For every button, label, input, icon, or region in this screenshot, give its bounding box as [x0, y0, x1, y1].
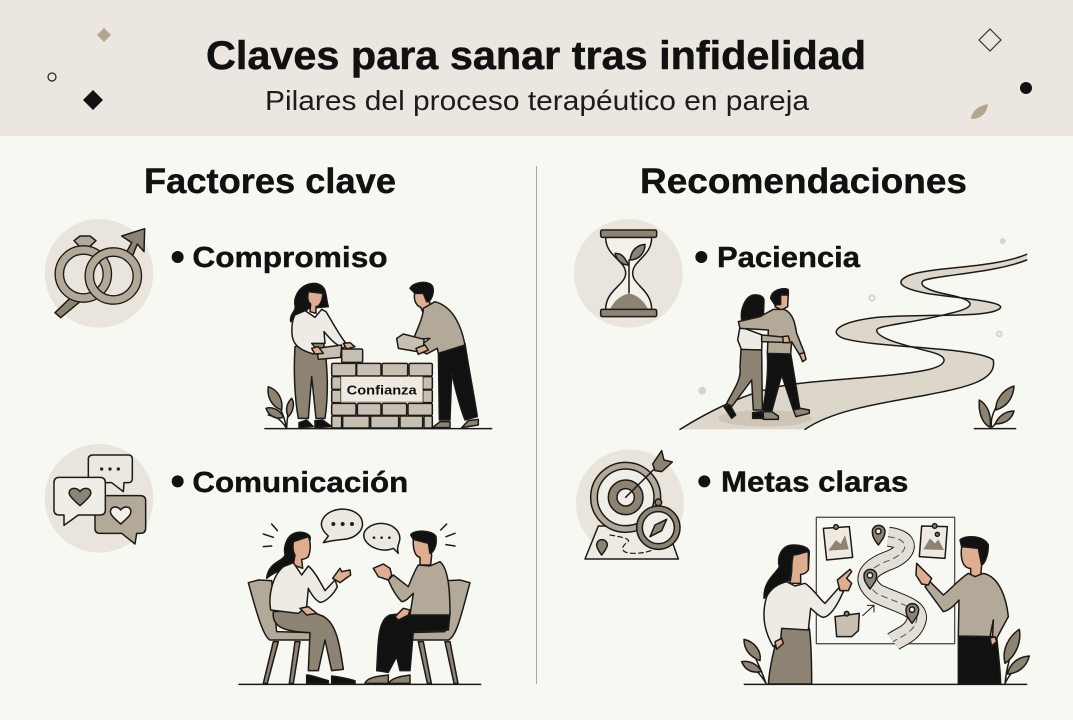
woman — [764, 545, 852, 684]
panel: compromiso — [45, 219, 492, 429]
bullet and label: compromiso: Compromiso — [192, 242, 388, 274]
dots — [331, 522, 391, 539]
icon: hourglass with sprout — [574, 219, 683, 328]
left chair — [248, 580, 312, 683]
brick wall: confianza — [332, 363, 432, 428]
plant — [974, 386, 1016, 429]
panel: paciencia — [574, 219, 1027, 429]
speech bubble — [321, 509, 362, 543]
bullet and label: metas claras: Metas claras — [721, 467, 908, 499]
right chair — [409, 580, 470, 683]
map pins — [864, 525, 919, 623]
pinned photo — [823, 525, 853, 560]
illustration: couple building a wall — [265, 282, 492, 429]
road — [867, 537, 917, 642]
arrow — [863, 605, 874, 616]
brick wall: confianza: Confianza — [347, 382, 417, 397]
subtitle: Pilares del proceso terapéutico en pareja — [265, 85, 809, 116]
header band — [0, 0, 1073, 136]
man — [365, 531, 450, 683]
panel: comunicación — [45, 444, 481, 684]
woman — [291, 283, 363, 428]
panel: metas claras — [576, 449, 1029, 684]
man — [397, 282, 478, 428]
sticky note — [835, 611, 859, 637]
bullet and label: paciencia: Paciencia — [717, 242, 861, 274]
icon: target, compass and map — [576, 449, 684, 559]
man — [916, 537, 1008, 684]
title: Claves para sanar tras infidelidad — [206, 34, 866, 78]
board with road map — [816, 517, 955, 644]
woman — [267, 532, 355, 683]
emphasis lines — [263, 524, 455, 547]
icon: speech bubbles — [45, 444, 153, 553]
plant — [266, 387, 293, 428]
illustration: couple walking — [724, 289, 809, 419]
heading: factores clave: Factores clave — [144, 162, 396, 201]
speech bubble — [364, 523, 400, 553]
icon: rings — [45, 219, 153, 328]
ground line — [239, 682, 481, 687]
plants and ground line — [742, 629, 1029, 684]
ground line — [265, 426, 492, 431]
illustration: couple talking on chairs — [239, 509, 481, 684]
pinned photo — [919, 524, 947, 558]
heading: recomendaciones: Recomendaciones — [640, 162, 967, 201]
illustration: winding road — [680, 238, 1027, 429]
bullet and label: comunicación: Comunicación — [192, 467, 408, 499]
